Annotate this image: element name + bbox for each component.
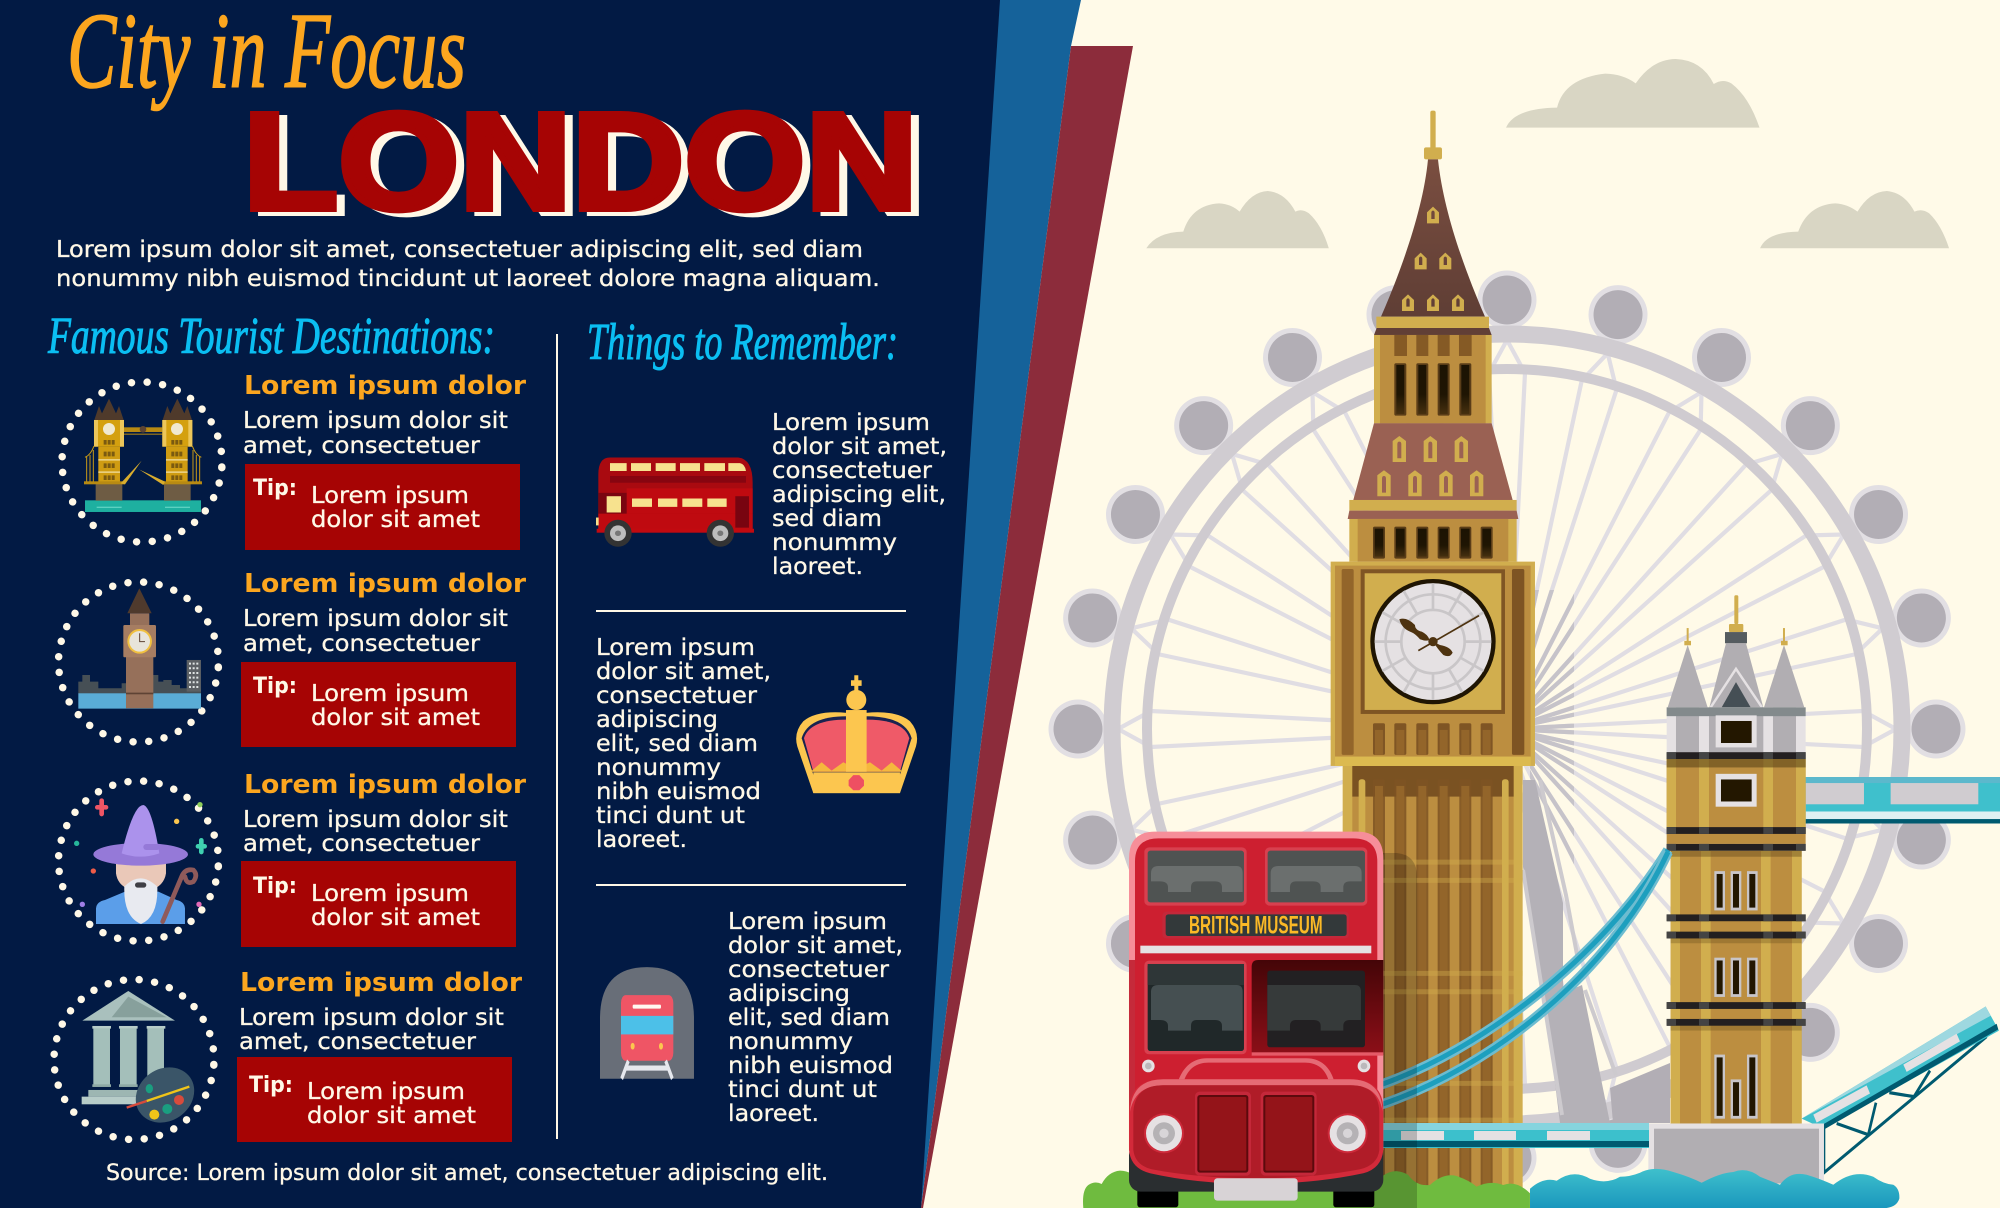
- heading: Lorem ipsum dolor: [244, 371, 526, 401]
- text: Lorem ipsum: [728, 909, 887, 935]
- illustration: bus shadow on tower: [1373, 853, 1417, 1208]
- tip box: [245, 464, 520, 550]
- destination 4: Museum: [49, 968, 522, 1145]
- tip box: [241, 861, 516, 947]
- text: dolor sit amet,: [772, 434, 947, 460]
- source line: Source: Lorem ipsum dolor sit amet, consectetuer adipiscing elit.: [106, 1161, 828, 1186]
- text: nibh euismod: [596, 779, 761, 805]
- description: Lorem ipsum dolor sit: [243, 807, 508, 833]
- icon: Big Ben in dotted circle: [53, 577, 224, 747]
- text: sed diam: [772, 506, 882, 532]
- description: Lorem ipsum dolor sit: [239, 1005, 504, 1031]
- description: amet, consectetuer: [243, 631, 481, 657]
- remember item 3: underground train: [600, 909, 903, 1127]
- lower windows: [1144, 960, 1383, 1056]
- spires: [1668, 595, 1804, 707]
- upper windows: [1144, 847, 1367, 906]
- illustration: London Eye wheel: [1048, 270, 1966, 1188]
- tip box: Lorem ipsum: [307, 1079, 465, 1105]
- lamps: [1142, 1060, 1370, 1072]
- tip box: Tip:: [253, 874, 297, 899]
- intro paragraph: [56, 237, 880, 292]
- description: amet, consectetuer: [243, 433, 481, 459]
- title: LONDON: LONDON: [243, 85, 918, 239]
- illustration: grass: [1083, 1171, 1530, 1208]
- vertical divider: [556, 334, 558, 1139]
- clock housing: [1331, 562, 1535, 766]
- clock face: [1370, 579, 1496, 704]
- text: [772, 410, 947, 580]
- tip box: Lorem ipsum: [311, 881, 469, 907]
- tip box: dolor sit amet: [311, 705, 480, 731]
- heading: Things to Remember: Things to Remember:: [587, 314, 898, 371]
- heading: Famous Tourist Destinations: Famous Tourist Destinations:: [47, 308, 495, 365]
- stone base: [1648, 1123, 1824, 1184]
- illustration: suspension cables and low deck: [1380, 850, 1668, 1148]
- raised bascule: [1802, 1007, 1999, 1173]
- shaft: [1343, 766, 1523, 1208]
- text: consectetuer: [772, 458, 933, 484]
- heading: Lorem ipsum dolor: [240, 968, 522, 998]
- remember item 1: bus: [596, 410, 947, 580]
- tip box: dolor sit amet: [307, 1103, 476, 1129]
- icon: train in tunnel: [600, 967, 694, 1079]
- headlights: [1144, 1113, 1368, 1153]
- description: Lorem ipsum dolor sit: [243, 606, 508, 632]
- icon: Tower Bridge in dotted circle: [57, 377, 227, 547]
- white strip: [1140, 946, 1371, 953]
- tip box: dolor sit amet: [311, 905, 480, 931]
- description: [243, 606, 508, 657]
- body: [1129, 832, 1383, 1150]
- illustration: front of double-decker bus: [1129, 832, 1383, 1207]
- destination sign: British Museum: BRITISH MUSEUM: [1189, 912, 1323, 940]
- destination 3: Wizard: [53, 770, 526, 947]
- wheels and underbody: [1129, 1143, 1383, 1207]
- clouds: [1146, 59, 1949, 248]
- icon: red double-decker bus: [596, 457, 754, 547]
- destination 1: Tower Bridge: [57, 371, 526, 550]
- text: dolor sit amet,: [728, 933, 903, 959]
- text: Lorem ipsum: [772, 410, 930, 436]
- remember item 2: crown: [596, 635, 917, 853]
- illustration: Tower Bridge: [1648, 595, 2000, 1184]
- text: nonummy: [596, 755, 721, 781]
- description: amet, consectetuer: [243, 831, 481, 857]
- spire: [1374, 111, 1492, 335]
- tip box: [237, 1057, 512, 1142]
- destination sign: British Museum: [1162, 912, 1349, 940]
- heading: Lorem ipsum dolor: [244, 770, 526, 800]
- text: consectetuer: [596, 683, 758, 709]
- title: LONDON: LONDON: [251, 89, 926, 243]
- icon: Wizard in dotted circle: [53, 776, 224, 946]
- description: amet, consectetuer: [239, 1029, 477, 1055]
- icon: Museum and palette in dotted circle: [49, 974, 219, 1145]
- divider: [596, 884, 906, 886]
- tip box: Lorem ipsum: [311, 483, 469, 509]
- upper belfry: [1348, 335, 1518, 562]
- heading: Lorem ipsum dolor: [244, 569, 526, 599]
- tip box: dolor sit amet: [311, 507, 480, 533]
- tip box: Tip:: [253, 476, 297, 501]
- hood: [1129, 1058, 1383, 1184]
- description: Lorem ipsum dolor sit: [243, 408, 508, 434]
- tip box: Tip:: [253, 674, 297, 699]
- destination 2: Big Ben: [53, 569, 526, 747]
- panel: maroon diagonal stripe: [921, 46, 1133, 1208]
- divider: [596, 610, 906, 612]
- intro paragraph: nonummy nibh euismod tincidunt ut laoreet dolore magna aliquam.: [56, 266, 880, 292]
- text: tinci dunt ut: [596, 803, 745, 829]
- text: adipiscing: [596, 707, 718, 733]
- text: adipiscing: [728, 981, 850, 1007]
- text: [596, 635, 771, 853]
- text: nonummy: [728, 1029, 853, 1055]
- text: laoreet.: [728, 1101, 819, 1127]
- text: nibh euismod: [728, 1053, 893, 1079]
- text: elit, sed diam: [728, 1005, 890, 1031]
- text: dolor sit amet,: [596, 659, 771, 685]
- tip box: [241, 662, 516, 747]
- bridge upper walkway: [1806, 777, 2000, 824]
- tip box: Tip:: [249, 1073, 293, 1098]
- text: consectetuer: [728, 957, 890, 983]
- text: laoreet.: [772, 554, 863, 580]
- description: [243, 807, 508, 857]
- intro paragraph: Lorem ipsum dolor sit amet, consectetuer adipiscing elit, sed diam: [56, 237, 863, 263]
- text: laoreet.: [596, 827, 687, 853]
- tower body: [1667, 707, 1806, 1123]
- description: [243, 408, 508, 459]
- panel: blue diagonal stripe: [910, 0, 1081, 1208]
- text: [728, 909, 903, 1127]
- panel: navy left panel: [0, 0, 1000, 1208]
- illustration: water: [1530, 1169, 1899, 1208]
- tip box: Lorem ipsum: [311, 681, 469, 707]
- description: [239, 1005, 504, 1055]
- number plate: [1214, 1178, 1298, 1201]
- text: nonummy: [772, 530, 897, 556]
- text: elit, sed diam: [596, 731, 758, 757]
- icon: crown: [796, 675, 917, 793]
- text: adipiscing elit,: [772, 482, 946, 508]
- illustration: Big Ben: [1331, 111, 1535, 1208]
- text: tinci dunt ut: [728, 1077, 877, 1103]
- text: Lorem ipsum: [596, 635, 755, 661]
